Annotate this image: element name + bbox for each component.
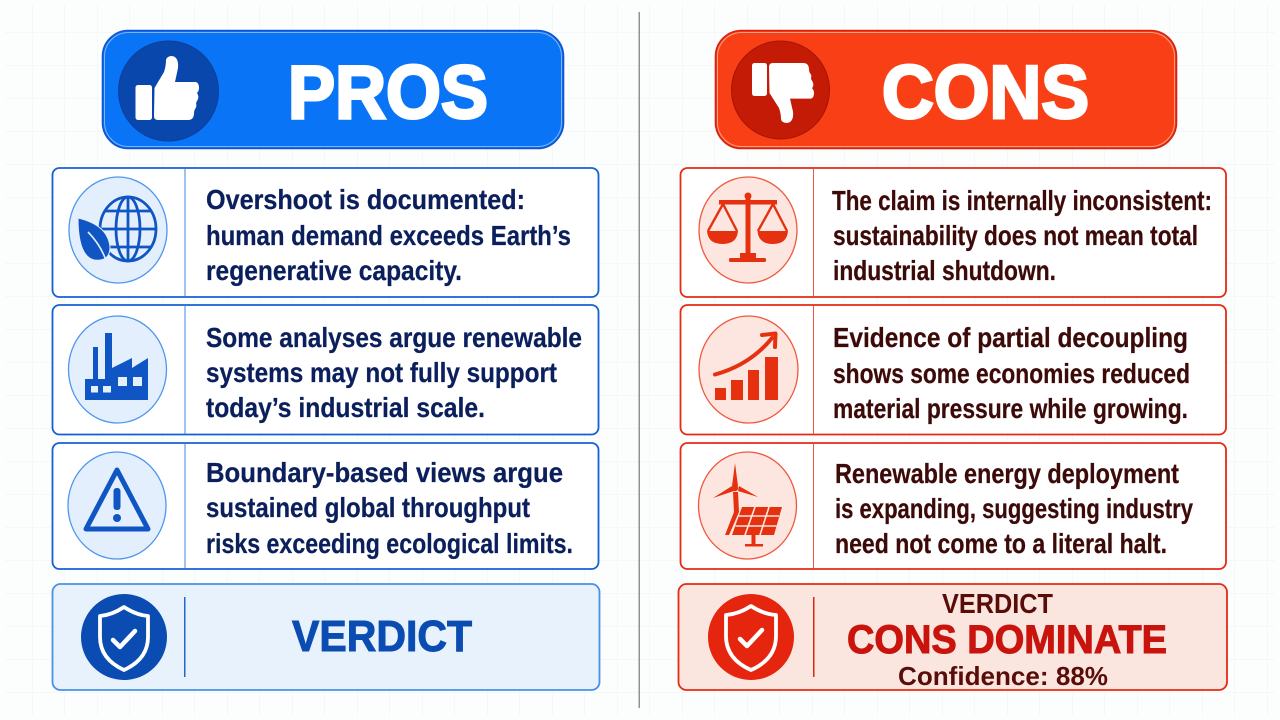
text: con point 2: shows some economies reduced [833,358,1190,389]
text: con point 1 [832,185,1212,286]
panel: con card 2 [680,305,1226,434]
text: con point 1: sustainability does not mean total [833,220,1198,251]
text: con point 2 [833,322,1190,424]
panel: cons header [716,30,1176,148]
icon: growth chart [699,316,798,423]
panel: con verdict [678,584,1227,691]
panel: pro verdict [52,584,600,690]
heading: cons: CONS [882,50,1089,134]
text: pro point 1: Overshoot is documented: [206,184,525,215]
text: con point 3: need not come to a literal halt. [835,528,1167,559]
icon: thumbs down [732,41,830,139]
icon: balance scales [699,177,797,283]
panel: pro card 3 [52,443,598,569]
text: cons dominate: CONS DOMINATE [847,618,1167,662]
text: pro point 3: sustained global throughput [206,492,530,523]
text: con point 3: Renewable energy deployment [835,458,1179,489]
panel: con card 1 [680,168,1226,297]
text: pro point 2: today’s industrial scale. [206,392,485,423]
text: pro point 2: Some analyses argue renewable [206,322,582,353]
icon: globe and leaf [69,177,167,283]
text: pro point 2: systems may not fully support [206,357,557,388]
text: pro point 1: regenerative capacity. [206,255,462,286]
text: con point 2: Evidence of partial decoupling [833,322,1188,353]
panel: con card 3 [680,443,1226,569]
icon: blue shield [81,594,167,680]
text: con point 3 [835,458,1193,559]
heading: verdict: VERDICT [292,612,472,661]
icon: thumbs up [118,41,218,141]
text: pro point 3: risks exceeding ecological limits. [206,528,573,559]
text: pro point 1 [206,184,571,286]
icon: red shield [708,594,794,680]
text: pro point 3: Boundary-based views argue [206,457,563,488]
panel: pro card 2 [52,305,598,434]
text: con point 3: is expanding, suggesting industry [835,493,1193,524]
icon: warning triangle [68,452,166,559]
heading: pros: PROS [288,50,488,134]
text: confidence: Confidence: 88% [898,661,1108,691]
icon: factory [68,316,166,423]
panel: pros header [102,30,564,148]
text: verdict label: VERDICT [942,588,1053,619]
text: pro point 1: human demand exceeds Earth’s [206,220,571,251]
text: pro point 2 [206,322,582,423]
text: con point 2: material pressure while growing. [833,393,1188,424]
icon: wind turbine and solar panel [698,452,796,559]
text: pro point 3 [206,457,573,559]
panel: pro card 1 [52,168,598,297]
text: con point 1: industrial shutdown. [833,255,1056,286]
